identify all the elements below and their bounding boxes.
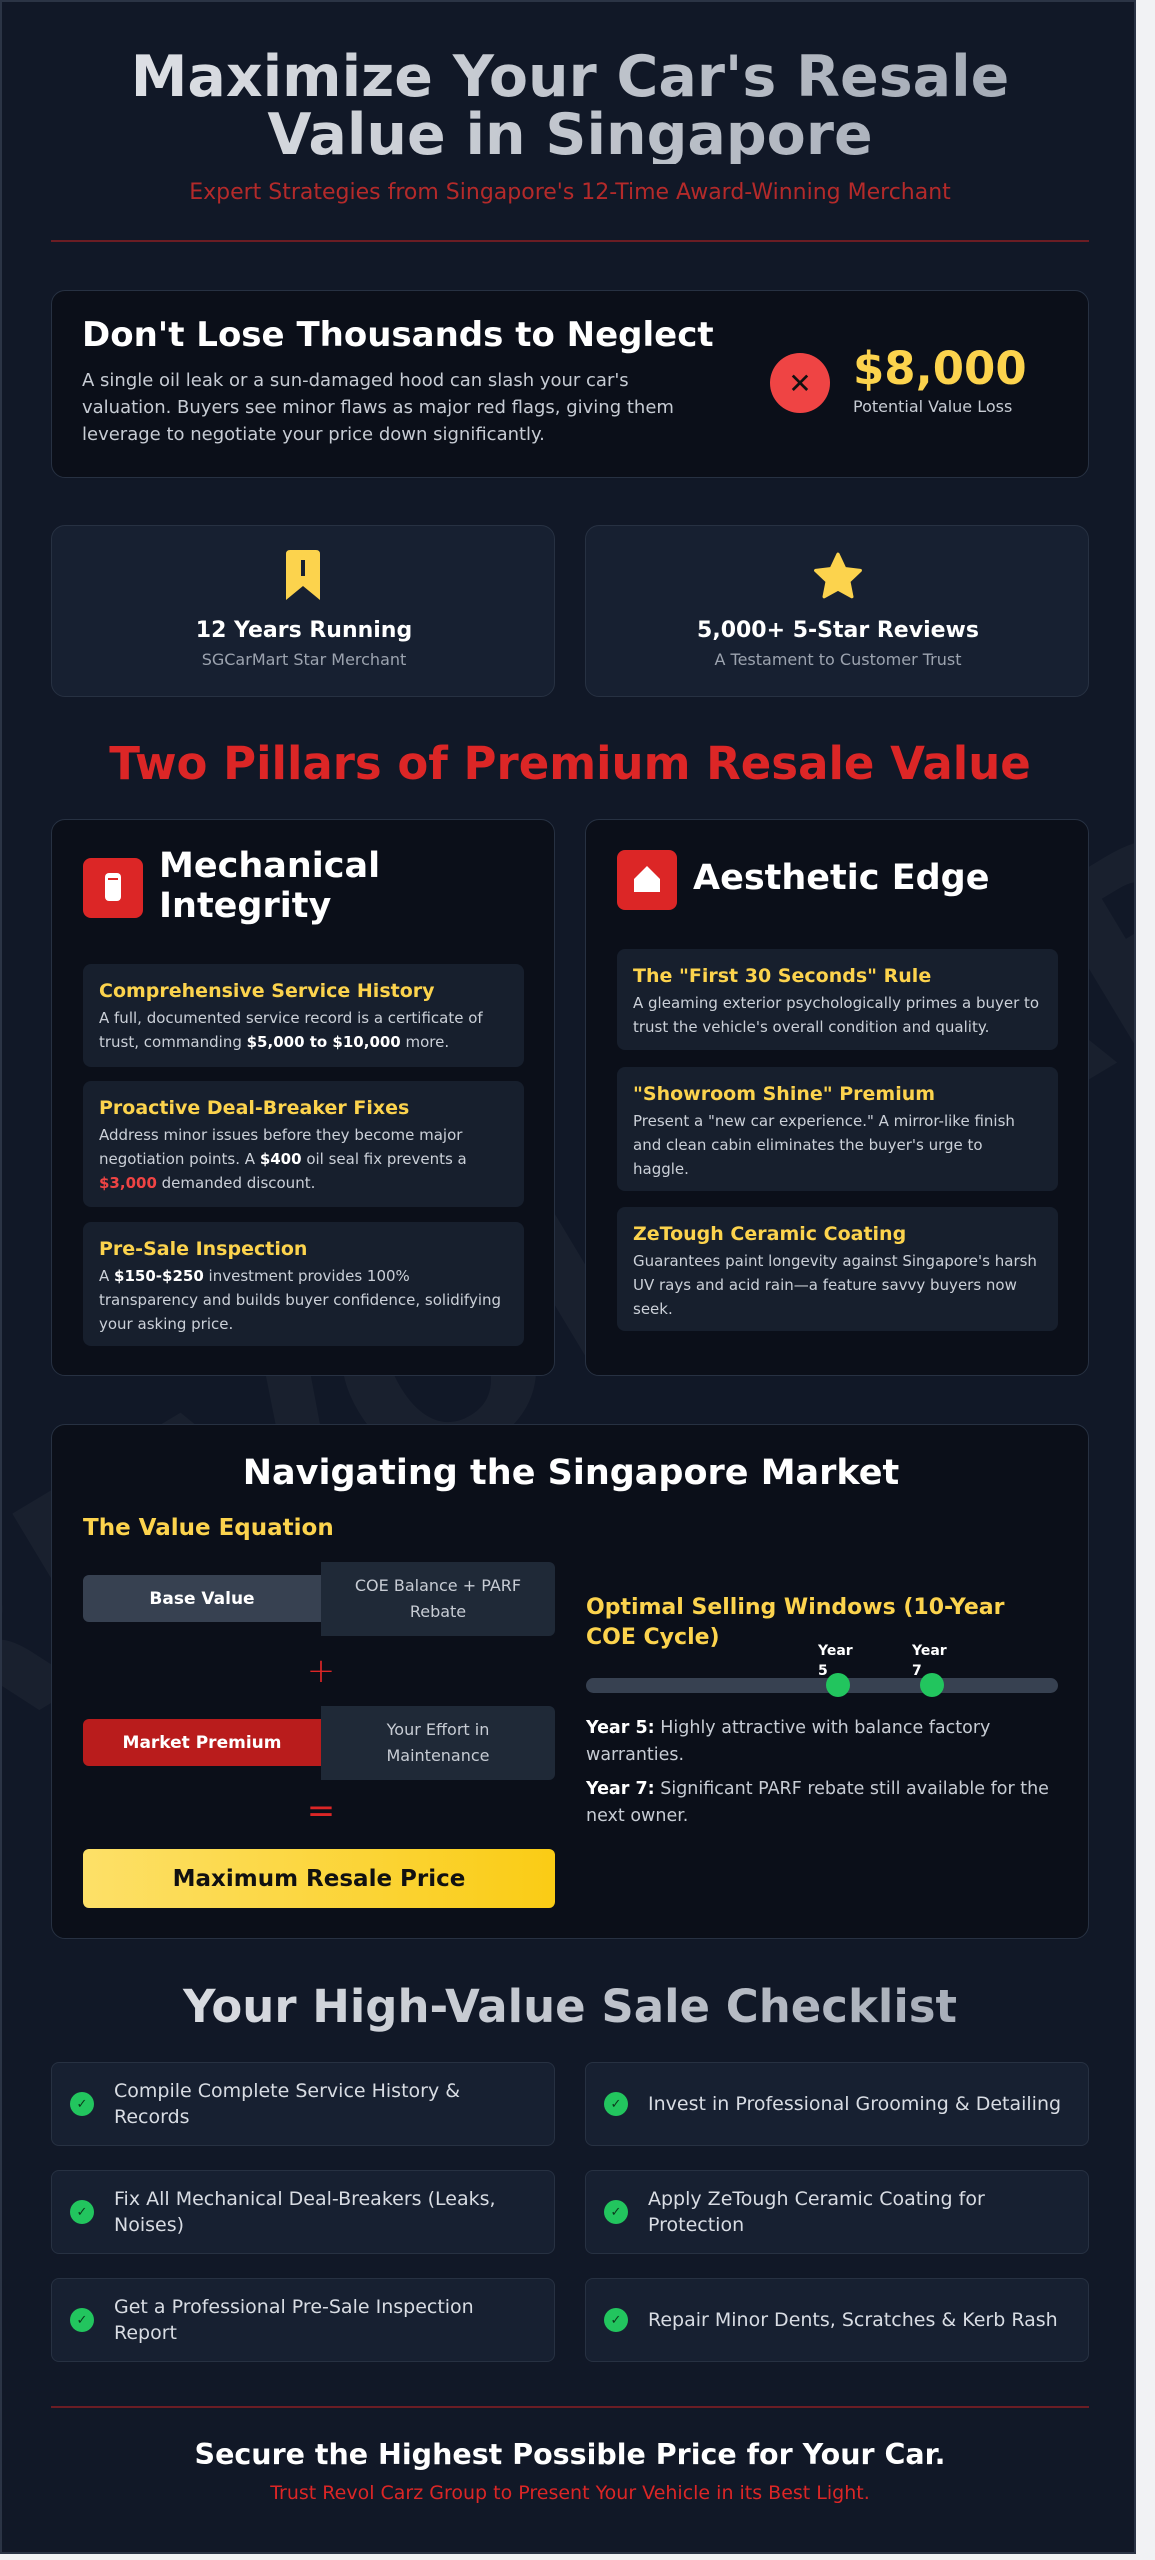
icon: star [814, 552, 862, 598]
item: deal-breaker [83, 1081, 524, 1207]
item: service history: A full, documented service record is a certificate of trust, commanding $5,000 to $10,000 more. [99, 1009, 483, 1051]
item: showroom shine [617, 1067, 1058, 1191]
result: maximum resale price: Maximum Resale Price [173, 1866, 465, 1892]
item: showroom shine: "Showroom Shine" Premium [633, 1083, 935, 1105]
item: Fix All Mechanical Deal-Breakers (Leaks, Noises) [114, 2188, 496, 2236]
item: inspection [83, 1222, 524, 1346]
heading: checklist [2, 1980, 1138, 2033]
icon: mechanical [83, 858, 143, 918]
equation: market premium [83, 1706, 555, 1780]
item [585, 2170, 1089, 2254]
item [51, 2062, 555, 2146]
panel: reviews [585, 525, 1089, 697]
title: Value in Singapore [267, 102, 873, 168]
plus sign: + [307, 1651, 335, 1691]
text block: A single oil leak or a sun-damaged hood can slash your car's valuation. Buyers see minor flaws as major red flags, giving them leverage to negotiate your price down significantly. [82, 370, 674, 445]
heading: Aesthetic Edge [693, 858, 989, 898]
heading: checklist: Your High-Value Sale Checklist [183, 1980, 957, 2033]
item: Apply ZeTough Ceramic Coating for Protection [648, 2188, 985, 2236]
item: deal-breaker: Proactive Deal-Breaker Fixes [99, 1097, 409, 1119]
icon: x circle [770, 353, 830, 413]
title: Maximize Your Car's Resale [131, 44, 1009, 110]
item: Get a Professional Pre-Sale Inspection Report [114, 2296, 474, 2344]
item: ✓ [611, 2204, 621, 2220]
panel: neglect warning [51, 290, 1089, 478]
item: first 30 seconds: A gleaming exterior psychologically primes a buyer to trust the vehicle's overall condition and quality. [633, 994, 1039, 1036]
item: inspection: Pre-Sale Inspection [99, 1238, 307, 1260]
subheading: selling windows: Optimal Selling Windows (10-Year COE Cycle) [586, 1595, 1004, 1650]
heading: Don't Lose Thousands to Neglect [82, 315, 714, 355]
item [585, 2278, 1089, 2362]
item [51, 2278, 555, 2362]
text: year notes [586, 1718, 1049, 1826]
item: Compile Complete Service History & Records [114, 2080, 460, 2128]
item [585, 2062, 1089, 2146]
item: deal-breaker: Address minor issues before they become major negotiation points. A $400 oil seal fix prevents a $3,000 demanded discount. [99, 1126, 467, 1192]
heading: two pillars: Two Pillars of Premium Resale Value [109, 737, 1031, 790]
item: ✓ [611, 2096, 621, 2112]
panel: 12 years: 12 Years Running [196, 618, 412, 643]
result: maximum resale price [83, 1849, 555, 1908]
panel: reviews: A Testament to Customer Trust [714, 650, 961, 669]
equation: base value: Base Value [149, 1588, 255, 1608]
checklist items [51, 2062, 1089, 2362]
item: ceramic coating: Guarantees paint longevity against Singapore's harsh UV rays and acid rain—a feature savvy buyers now seek. [633, 1252, 1037, 1318]
footer heading: Secure the Highest Possible Price for Your Car. [195, 2438, 945, 2471]
icon: home [617, 850, 677, 910]
item: Repair Minor Dents, Scratches & Kerb Rash [648, 2309, 1058, 2331]
heading: Integrity [159, 886, 331, 926]
item: service history [83, 964, 524, 1067]
heading [159, 846, 380, 926]
panel: singapore market [51, 1424, 1089, 1939]
panel: 12 years [51, 525, 555, 697]
equation: base value: COE Balance + PARF [355, 1576, 521, 1595]
item: ✓ [77, 2312, 87, 2328]
item: ceramic coating [617, 1207, 1058, 1331]
heading: Mechanical [159, 846, 380, 886]
item: ✓ [77, 2096, 87, 2112]
item: showroom shine: Present a "new car experience." A mirror-like finish and clean cabin eliminates the buyer's urge to haggle. [633, 1112, 1015, 1178]
stat: $8,000: $8,000 [853, 342, 1027, 395]
equation: base value: Rebate [410, 1602, 466, 1621]
item: Invest in Professional Grooming & Detailing [648, 2093, 1061, 2115]
equation: market premium: Maintenance [386, 1746, 490, 1765]
item: ceramic coating: ZeTough Ceramic Coating [633, 1223, 906, 1245]
item: first 30 seconds: The "First 30 Seconds" Rule [633, 965, 931, 987]
equation: market premium: Market Premium [123, 1732, 281, 1752]
subheading: value equation: The Value Equation [83, 1515, 334, 1541]
icon: bookmark [286, 550, 320, 600]
footer subtext: Trust Revol Carz Group to Present Your Vehicle in its Best Light. [270, 2482, 870, 2504]
panel: 12 years: SGCarMart Star Merchant [202, 650, 406, 669]
item: first 30 seconds [617, 949, 1058, 1050]
item: inspection: A $150-$250 investment provides 100% transparency and builds buyer confidence, solidifying your asking price. [99, 1267, 501, 1333]
equation: market premium: Your Effort in [387, 1720, 489, 1739]
equation: base value [83, 1562, 555, 1636]
title [2, 48, 1138, 164]
panel: reviews: 5,000+ 5-Star Reviews [697, 618, 979, 643]
item: ✓ [77, 2204, 87, 2220]
equals sign: = [307, 1791, 335, 1831]
panel: aesthetic edge [585, 819, 1089, 1376]
icon: x circle: ✕ [788, 366, 812, 400]
heading: Navigating the Singapore Market [243, 1453, 899, 1493]
text: year notes: Year 7: Significant PARF rebate still available for the next owner. [586, 1779, 1049, 1826]
text: year notes: Year 5: Highly attractive with balance factory warranties. [586, 1718, 990, 1765]
panel: mechanical integrity [51, 819, 555, 1376]
item: ✓ [611, 2312, 621, 2328]
stat: $8,000: Potential Value Loss [853, 397, 1012, 416]
timeline: Year 5 [818, 1643, 853, 1679]
timeline [586, 1643, 1058, 1697]
subtitle: Expert Strategies from Singapore's 12-Time Award-Winning Merchant [189, 180, 951, 205]
item: service history: Comprehensive Service History [99, 980, 435, 1002]
item [51, 2170, 555, 2254]
timeline: Year 7 [912, 1643, 947, 1679]
